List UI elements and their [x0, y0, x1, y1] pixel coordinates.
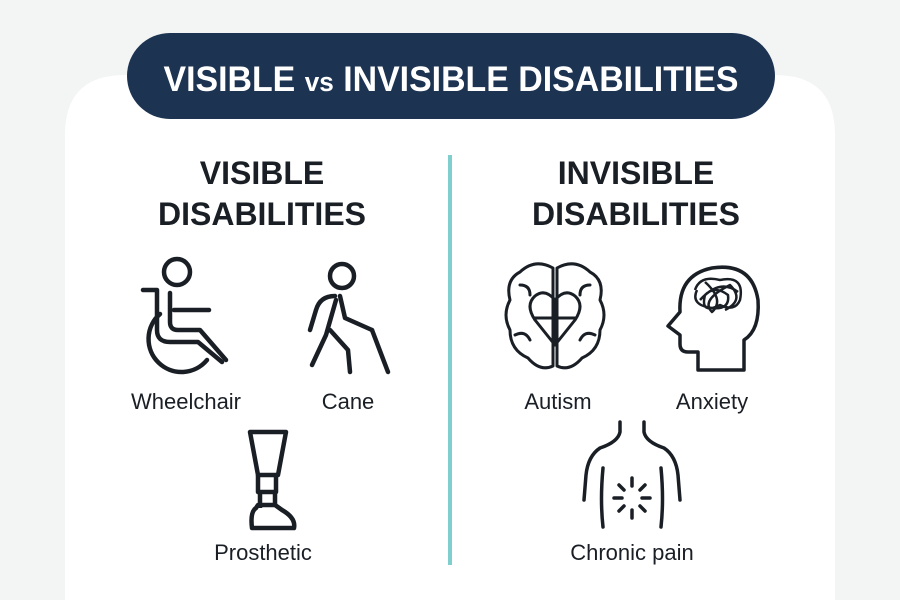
- label: wheelchair: Wheelchair: [131, 389, 241, 414]
- title banner: [127, 33, 775, 119]
- label: autism: Autism: [524, 389, 592, 414]
- card background: [65, 75, 835, 600]
- heading: invisible disabilities: [532, 155, 740, 232]
- heading: invisible disabilities: DISABILITIES: [532, 196, 740, 232]
- icon: anxious head: [668, 267, 758, 370]
- icon: wheelchair: [143, 259, 226, 372]
- icon: back pain torso: [584, 422, 680, 527]
- icon: prosthetic: [250, 432, 294, 528]
- heading: invisible disabilities: INVISIBLE: [558, 155, 714, 191]
- title banner: VISIBLE vs INVISIBLE DISABILITIES: [164, 60, 738, 99]
- icon: cane: [310, 264, 388, 372]
- label: prosthetic: Prosthetic: [214, 540, 312, 565]
- heading: visible disabilities: DISABILITIES: [158, 196, 366, 232]
- label: cane: Cane: [322, 389, 374, 414]
- heading: visible disabilities: VISIBLE: [200, 155, 324, 191]
- label: anxiety: Anxiety: [676, 389, 748, 414]
- divider: [448, 155, 452, 565]
- icon: brain with puzzle heart: [506, 264, 604, 368]
- label: chronic pain: Chronic pain: [570, 540, 694, 565]
- heading: visible disabilities: [158, 155, 366, 232]
